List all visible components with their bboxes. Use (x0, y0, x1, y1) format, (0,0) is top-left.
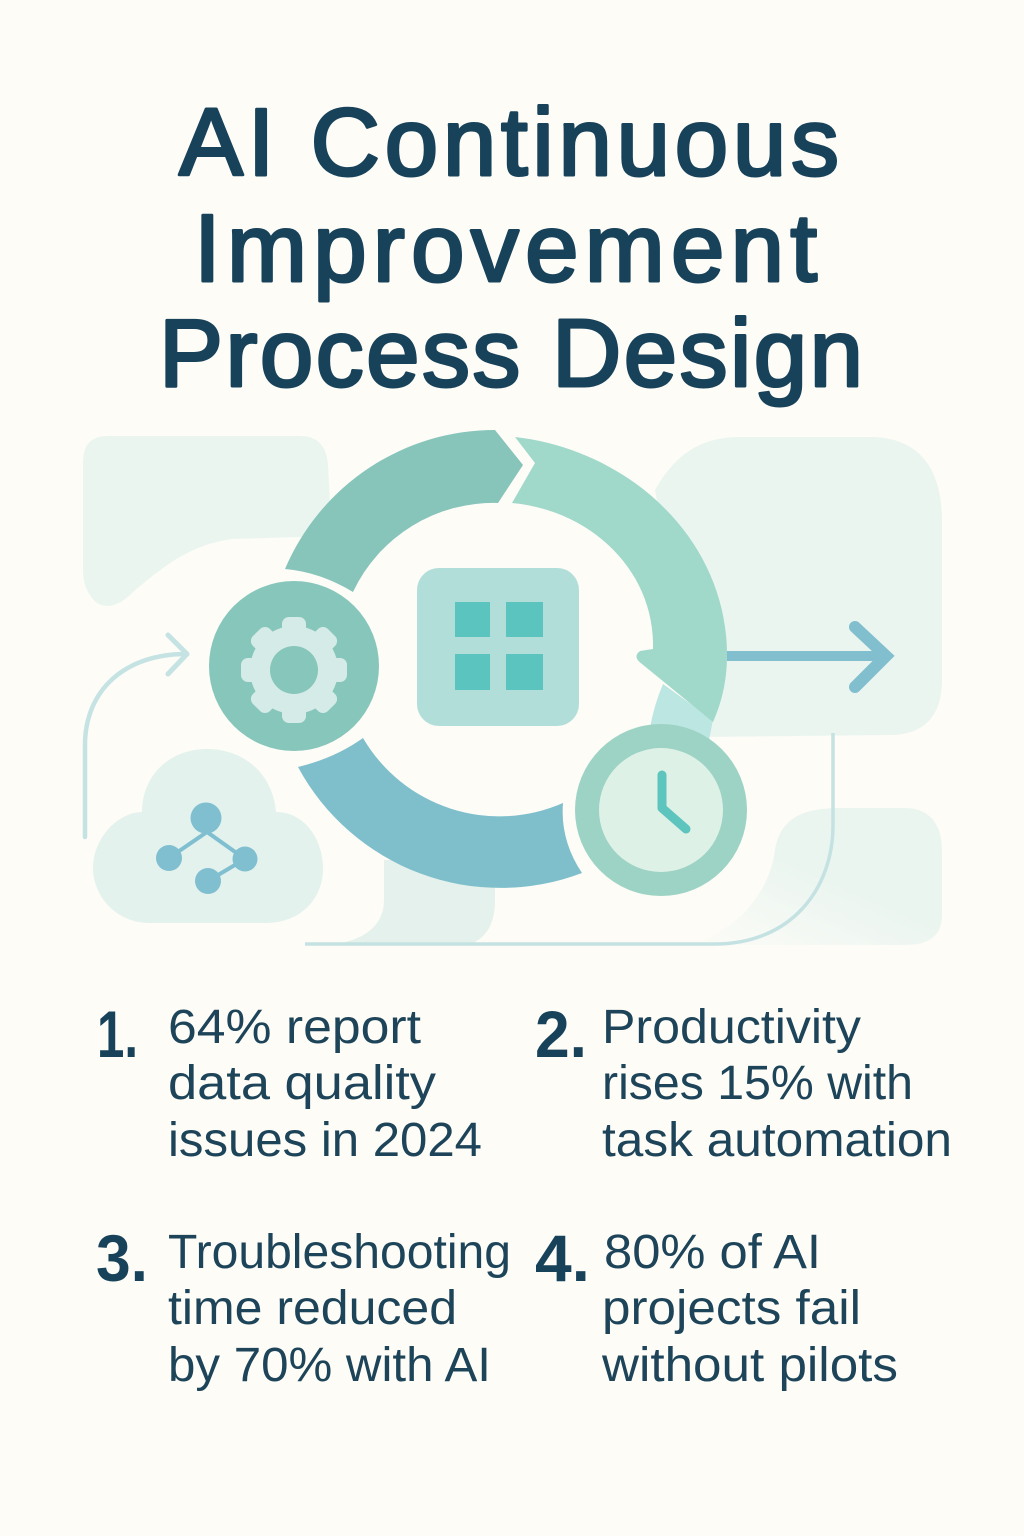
ring segment: blue (298, 738, 582, 888)
stat 2: task automation (602, 1114, 952, 1167)
icon: clock (575, 724, 747, 896)
background panel: bottom centre (335, 860, 495, 944)
stat 2: rises 15% with (602, 1057, 913, 1110)
stat 1: 1. (97, 997, 138, 1071)
title: AI Continuous (179, 89, 839, 196)
connector line: bottom to right panel (305, 733, 833, 944)
process cycle diagram (83, 430, 942, 945)
stat 4 (535, 1221, 898, 1392)
stat 3: 3. (96, 1221, 148, 1295)
title (159, 89, 863, 407)
stat 1: data quality (168, 1057, 436, 1110)
stat 3 (96, 1221, 511, 1392)
stat 2: Productivity (602, 1001, 861, 1054)
ring segment: light teal connector (650, 684, 713, 745)
arrow: right output (727, 627, 886, 687)
stat 3: Troubleshooting (168, 1226, 511, 1279)
stat 4: without pilots (601, 1339, 898, 1392)
stat 2 (535, 997, 952, 1167)
icon: gear in circle (209, 581, 379, 751)
background panel: top left (83, 436, 332, 606)
stat 3: by 70% with AI (168, 1339, 491, 1392)
title: Improvement (194, 195, 817, 302)
icon: cloud network (93, 749, 323, 923)
curved arrow: cloud to gear (85, 635, 187, 837)
ring segment: mint with arrowhead (512, 437, 727, 722)
icon: dashboard grid (417, 568, 579, 726)
background panel: right (655, 437, 942, 737)
stat 1: 64% report (168, 1001, 421, 1054)
stat 2: 2. (535, 997, 587, 1071)
stat 4: projects fail (602, 1282, 861, 1335)
stat 1 (97, 997, 482, 1167)
title: Process Design (159, 300, 863, 407)
ring segment: dark teal (285, 430, 523, 592)
stat 4: 80% of AI (604, 1226, 821, 1279)
background panel: bottom right (690, 808, 942, 945)
stat 4: 4. (535, 1221, 590, 1295)
stat 3: time reduced (168, 1282, 457, 1335)
stat 1: issues in 2024 (168, 1114, 482, 1167)
